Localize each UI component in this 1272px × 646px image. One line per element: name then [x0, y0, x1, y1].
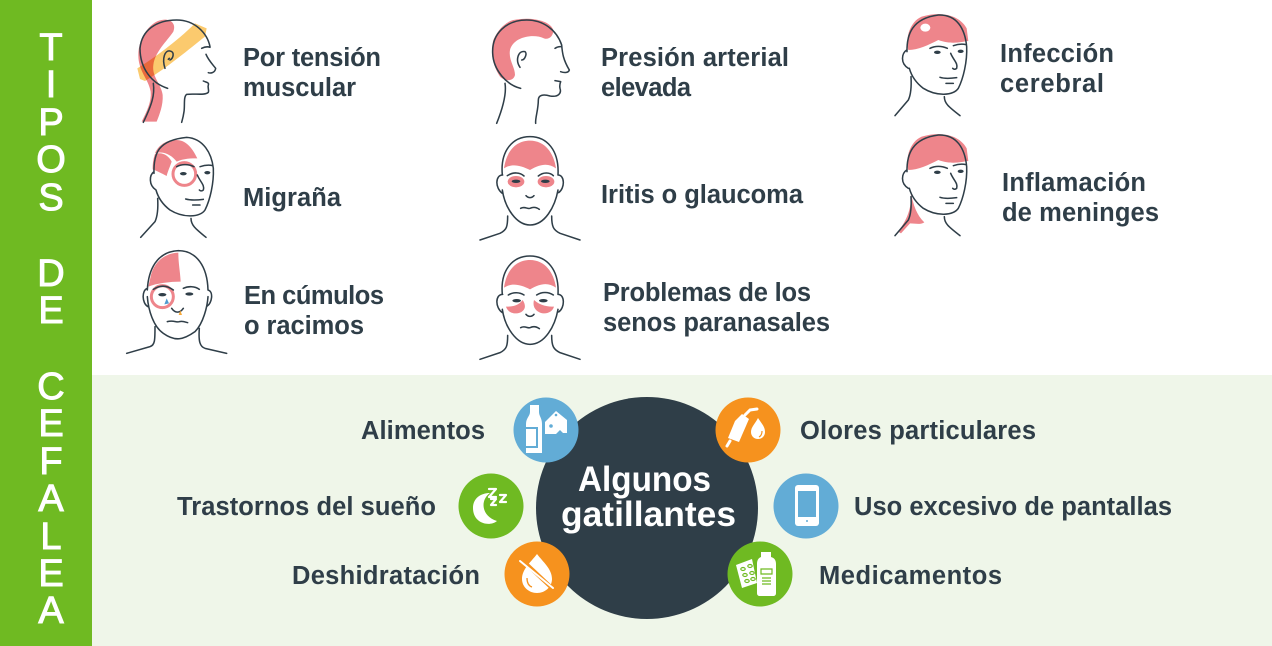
label: en cumulos: o racimos — [244, 312, 364, 340]
vertical title bar: F — [39, 441, 63, 483]
vertical title bar: D — [37, 253, 65, 295]
icon: crossed water drop — [504, 542, 570, 606]
label: migrana: Migraña — [243, 184, 342, 212]
label: medicamentos: Medicamentos — [819, 562, 1002, 590]
label: por tension: muscular — [243, 74, 356, 102]
icon: brain infection head — [895, 14, 968, 116]
vertical title bar: C — [37, 366, 65, 408]
label: senos paranasales: senos paranasales — [603, 309, 830, 337]
vertical title bar: A — [38, 590, 64, 632]
label: deshidratacion: Deshidratación — [292, 562, 480, 590]
vertical title bar: T — [39, 27, 63, 69]
label: uso excesivo de pantallas: Uso excesivo de pantallas — [854, 493, 1172, 521]
icon: cluster headache head — [127, 251, 227, 353]
icon: iritis head — [480, 137, 580, 240]
panel: triggers background — [92, 375, 1272, 646]
icon: smartphone — [774, 474, 838, 538]
vertical title bar: E — [38, 403, 64, 445]
central circle: algunos gatillantes: gatillantes — [561, 495, 736, 534]
icon: sinus head — [480, 256, 580, 359]
vertical title bar: A — [38, 478, 64, 520]
icon: tension headache head — [137, 20, 216, 122]
label: por tension — [243, 44, 381, 102]
icon: migraine head — [141, 137, 213, 237]
vertical title bar: L — [40, 516, 62, 558]
label: infeccion — [1000, 40, 1114, 98]
icon: fuel nozzle and drop — [716, 398, 780, 462]
label: en cumulos: En cúmulos — [244, 282, 384, 310]
vertical title bar — [0, 0, 92, 646]
label: por tension: Por tensión — [243, 44, 381, 72]
label: inflamacion: Inflamación — [1002, 169, 1146, 197]
label: infeccion: Infección — [1000, 40, 1114, 68]
label: senos paranasales — [603, 279, 830, 337]
central circle: algunos gatillantes — [536, 397, 758, 619]
vertical title bar: P — [38, 102, 64, 144]
label: olores particulares: Olores particulares — [800, 417, 1036, 445]
vertical title bar: O — [36, 139, 66, 181]
vertical title bar: I — [46, 64, 56, 106]
label: infeccion: cerebral — [1000, 70, 1104, 98]
vertical title bar: E — [38, 553, 64, 595]
vertical title bar: E — [38, 290, 64, 332]
icon: meninges inflammation head — [895, 134, 968, 236]
central circle: algunos gatillantes: Algunos — [578, 460, 711, 499]
label: presion arterial: elevada — [601, 74, 692, 102]
icon: moon and zzz — [458, 474, 524, 538]
label: presion arterial: Presión arterial — [601, 44, 789, 72]
label: inflamacion — [1002, 169, 1159, 227]
icon: high blood pressure head — [492, 19, 569, 123]
label: alimentos: Alimentos — [361, 417, 485, 445]
icon: food and drink — [514, 398, 578, 462]
label: iritis: Iritis o glaucoma — [601, 181, 804, 209]
icon: medicines — [728, 542, 792, 606]
label: senos paranasales: Problemas de los — [603, 279, 811, 307]
label: en cumulos — [244, 282, 384, 340]
label: trastornos del sueno: Trastornos del sueño — [177, 493, 436, 521]
vertical title bar: S — [38, 177, 64, 219]
label: presion arterial — [601, 44, 789, 102]
label: inflamacion: de meninges — [1002, 199, 1159, 227]
